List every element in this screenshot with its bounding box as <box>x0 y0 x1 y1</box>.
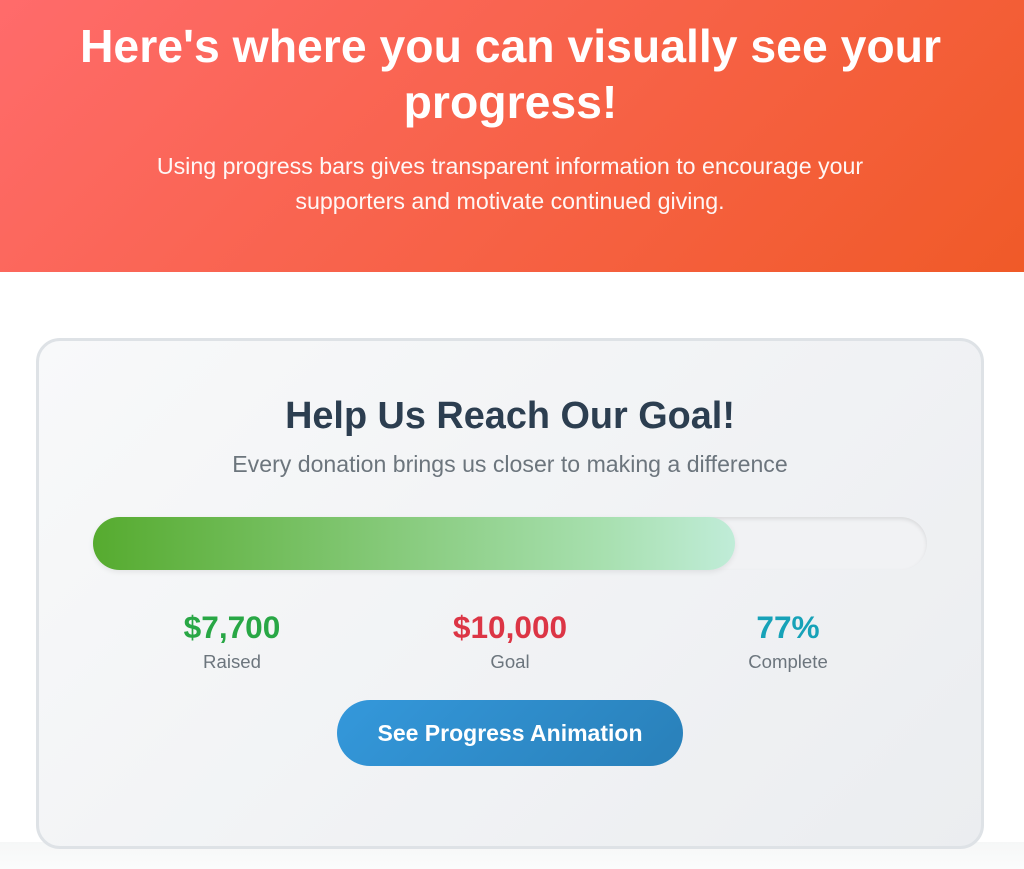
title: progress! <box>404 76 617 128</box>
subtitle: Using progress bars gives transparent information to encourage your <box>157 153 863 179</box>
title: Here's where you can visually see your <box>80 20 941 72</box>
subtitle <box>157 153 863 214</box>
goal label: Goal <box>490 651 530 672</box>
stat: goal <box>453 609 567 672</box>
progress fill 77% <box>93 517 735 570</box>
stat: raised <box>184 609 280 672</box>
footer band <box>0 842 1024 869</box>
panel: progress card <box>36 338 984 849</box>
raised value: $7,700 <box>184 609 280 645</box>
card subheading: Every donation brings us closer to making a difference <box>232 451 788 477</box>
complete value: 77% <box>756 609 820 645</box>
card heading: Help Us Reach Our Goal! <box>285 395 735 437</box>
stat: complete <box>748 609 828 672</box>
button <box>337 700 683 766</box>
title <box>80 20 941 128</box>
subtitle: supporters and motivate continued giving. <box>295 188 725 214</box>
button: See Progress Animation <box>377 720 642 746</box>
header banner <box>0 0 1024 272</box>
complete label: Complete <box>748 651 828 672</box>
progress track <box>93 517 927 570</box>
goal value: $10,000 <box>453 609 567 645</box>
raised label: Raised <box>203 651 261 672</box>
